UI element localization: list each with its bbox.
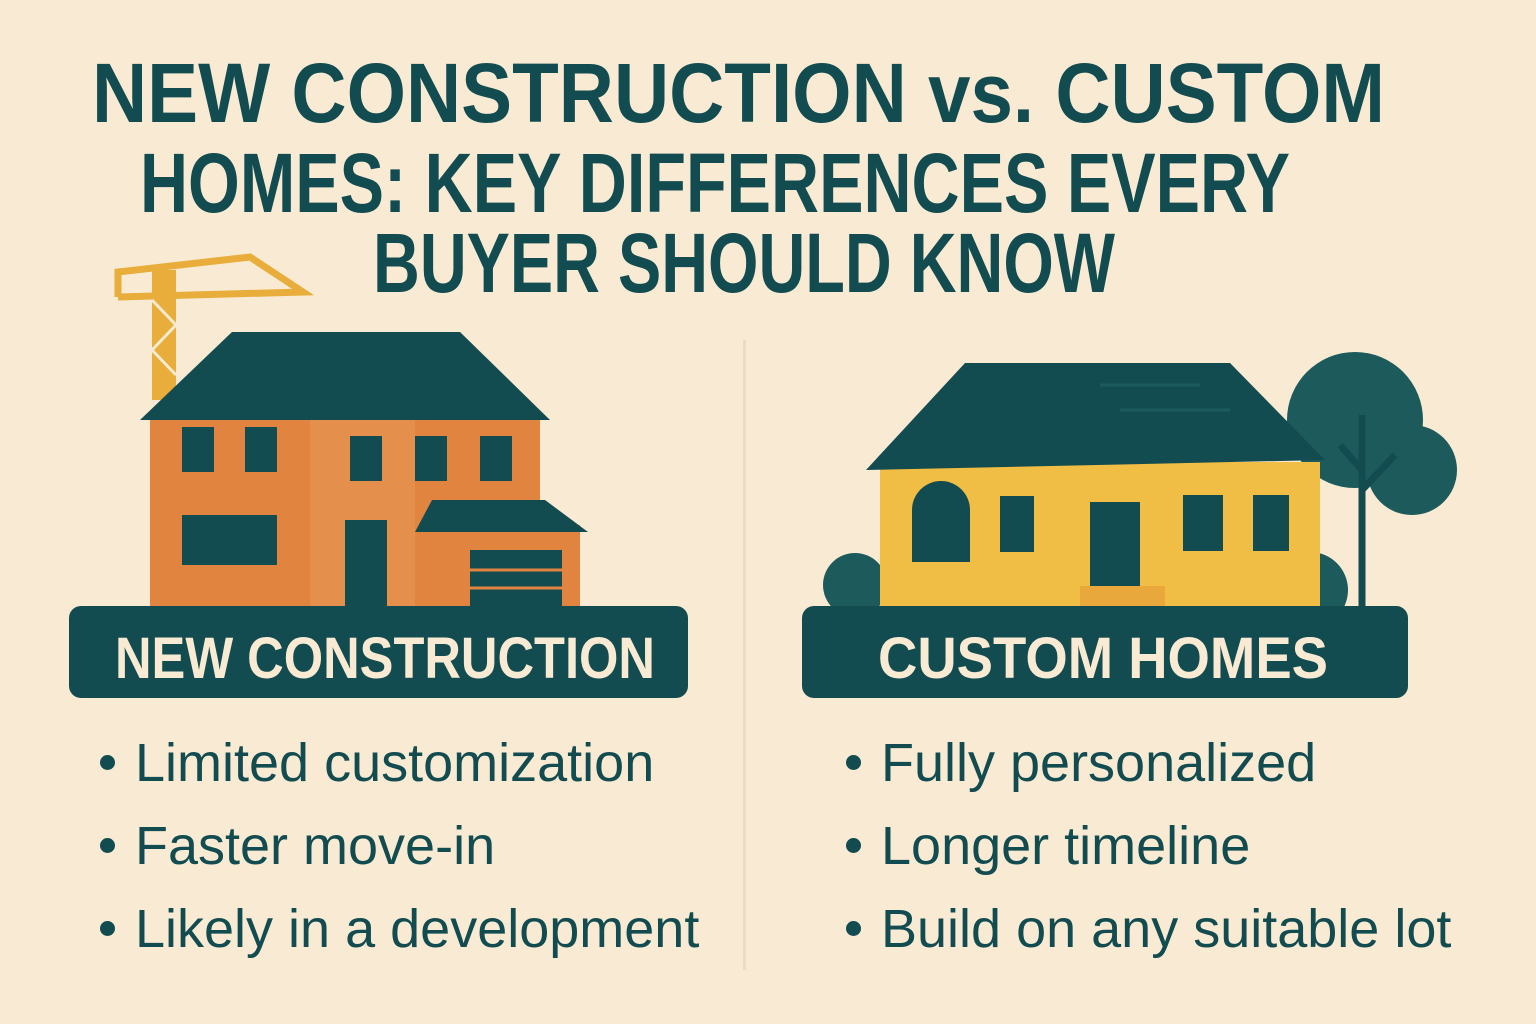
bullets: new construction: Likely in a development xyxy=(135,899,699,959)
label: custom homes: CUSTOM HOMES xyxy=(878,626,1328,691)
bullets: new construction: Faster move-in xyxy=(135,816,495,876)
bullets: custom homes: Build on any suitable lot xyxy=(881,899,1451,959)
title: NEW CONSTRUCTION vs. CUSTOM xyxy=(92,46,1385,140)
illustration: new construction house with crane xyxy=(114,253,588,606)
divider xyxy=(743,340,746,970)
bullets: new construction xyxy=(100,733,699,959)
bullets: custom homes: Fully personalized xyxy=(881,733,1316,793)
title xyxy=(92,46,1385,310)
title: BUYER SHOULD KNOW xyxy=(373,216,1116,310)
bullets: custom homes: Longer timeline xyxy=(881,816,1250,876)
illustration: custom home with tree xyxy=(823,352,1457,606)
bullets: new construction: Limited customization xyxy=(135,733,654,793)
label: custom homes xyxy=(802,606,1408,698)
label: new construction xyxy=(69,606,688,698)
bullets: custom homes xyxy=(846,733,1451,959)
